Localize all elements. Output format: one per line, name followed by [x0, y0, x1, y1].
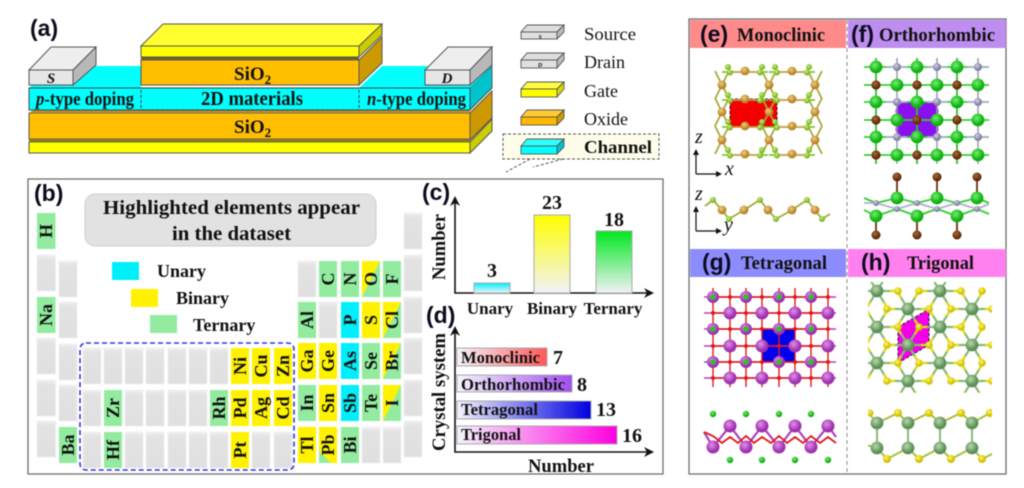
channel highlight box	[503, 134, 659, 172]
highlighted elements: S	[361, 315, 381, 325]
legend source: S	[538, 35, 542, 41]
highlighted elements: O	[361, 272, 381, 286]
axes side e: y	[722, 214, 733, 236]
bottom oxide label: 2	[265, 125, 271, 140]
highlighted elements: Na	[36, 304, 56, 326]
panel: trigonal (h)	[848, 249, 1006, 463]
highlighted elements: Ba	[58, 434, 78, 456]
unit cell f	[896, 102, 938, 138]
highlighted elements: Ga	[297, 349, 317, 373]
bar: monoclinic: Monoclinic	[461, 348, 540, 367]
source contact: S	[47, 71, 55, 87]
legend: element types: Binary	[176, 288, 229, 308]
highlighted elements: Cu	[251, 354, 271, 378]
top view atoms h	[867, 281, 993, 394]
legend oxide	[521, 109, 628, 129]
header e	[690, 20, 846, 48]
header f: (f)	[851, 21, 874, 47]
legend drain: D	[537, 63, 543, 69]
highlighted elements: N	[340, 272, 360, 286]
header h: (h)	[861, 249, 890, 275]
panel: monoclinic (e)	[690, 20, 846, 236]
highlighted elements: Sn	[318, 393, 338, 413]
axes top e: x	[724, 158, 734, 180]
highlighted elements: Tl	[297, 436, 317, 454]
side view atoms g	[704, 411, 836, 463]
highlighted elements: Sb	[340, 393, 360, 413]
side view atoms f	[864, 172, 989, 240]
y label c: Number	[430, 214, 450, 280]
bar: trigonal	[457, 425, 642, 447]
x label d: Number	[528, 457, 594, 477]
bar: unary: 3	[487, 260, 497, 282]
panel frame b c d	[28, 179, 663, 474]
legend channel	[521, 137, 652, 157]
side view atoms h	[866, 409, 994, 463]
side view atoms e	[705, 197, 830, 222]
highlighted elements: Hf	[103, 439, 123, 460]
legend: element types: Ternary	[193, 315, 255, 335]
transition metals dashed box	[80, 343, 294, 470]
axes side e: z	[694, 183, 703, 205]
top view atoms g	[704, 288, 836, 387]
drain contact	[425, 47, 492, 87]
highlighted elements: Rh	[209, 396, 229, 420]
channel layer: 2D materials	[201, 89, 303, 110]
title box: in the dataset	[172, 223, 291, 245]
bar: binary	[527, 192, 578, 318]
header h	[848, 249, 1006, 277]
label b: (b)	[34, 180, 63, 206]
gate stack: 2	[265, 72, 271, 87]
highlighted elements: Se	[361, 352, 381, 370]
axes top e	[693, 126, 734, 180]
highlighted elements: Pb	[318, 434, 338, 456]
bar: trigonal: 16	[622, 425, 642, 447]
bar: binary: 23	[542, 192, 562, 214]
bar: binary: Binary	[527, 299, 578, 318]
highlighted elements: F	[382, 274, 402, 284]
title box	[85, 194, 376, 246]
panel: orthorhombic (f)	[848, 20, 1006, 240]
legend source: Source	[584, 24, 636, 44]
label c: (c)	[422, 179, 450, 205]
y label d: Crystal system	[430, 332, 450, 451]
highlighted elements: I	[382, 399, 402, 407]
highlighted elements: In	[297, 394, 317, 412]
bar: tetragonal: 13	[596, 399, 616, 421]
gate stack	[141, 24, 382, 87]
channel layer	[29, 88, 470, 110]
bar: ternary: Ternary	[584, 299, 643, 318]
legend: element types: Unary	[157, 261, 206, 281]
crystal structures frame	[689, 19, 1006, 474]
panel: bar chart (c)	[422, 179, 654, 318]
highlighted elements: Zr	[103, 398, 123, 418]
highlighted elements: Ge	[318, 350, 338, 372]
highlighted elements: Ag	[251, 397, 271, 419]
legend source	[521, 24, 636, 44]
source contact	[29, 47, 96, 87]
legend oxide: Oxide	[584, 109, 628, 129]
bar: tetragonal	[457, 399, 616, 421]
legend drain: Drain	[584, 52, 625, 72]
axes top e: z	[694, 126, 703, 148]
channel layer: p-type doping	[34, 89, 134, 110]
legend drain	[521, 52, 625, 72]
axes side e	[693, 183, 733, 236]
bar: ternary: 18	[604, 209, 624, 231]
highlighted elements: As	[340, 351, 360, 371]
top view atoms e	[715, 64, 822, 158]
bar: trigonal: Trigonal	[461, 425, 521, 444]
bar: orthorhombic: Orthorhombic	[461, 375, 565, 394]
panel: bar chart (d)	[426, 302, 654, 477]
legend gate: Gate	[584, 81, 618, 101]
drain contact: D	[441, 71, 453, 87]
channel layer: n-type doping	[367, 89, 466, 110]
bar: monoclinic	[457, 347, 563, 369]
legend: device layers	[503, 24, 659, 172]
legend gate	[521, 81, 618, 101]
header f	[848, 20, 1006, 48]
header g: (g)	[702, 249, 731, 275]
highlighted elements: Zn	[273, 355, 293, 377]
bar: ternary	[584, 209, 643, 318]
bar: monoclinic: 7	[553, 347, 563, 369]
highlighted elements: Al	[297, 311, 317, 329]
highlighted elements: Bi	[340, 436, 360, 454]
top view atoms f	[864, 58, 989, 164]
highlighted elements: Te	[361, 394, 381, 412]
header h: Trigonal	[907, 254, 974, 274]
highlighted elements: Pd	[230, 397, 250, 419]
bar: orthorhombic: 8	[577, 374, 587, 396]
panel: periodic table (b)	[34, 180, 422, 470]
bar: tetragonal: Tetragonal	[461, 400, 538, 419]
highlighted elements: Cd	[273, 396, 293, 420]
unit cell g	[762, 329, 795, 362]
panel: device schematic (a)	[29, 15, 492, 153]
empty element cells	[37, 213, 422, 468]
gate stack: SiO	[234, 64, 265, 85]
unit cell h	[898, 309, 929, 363]
highlighted elements: P	[340, 314, 360, 326]
header e: Monoclinic	[737, 26, 825, 46]
highlighted elements: H	[36, 224, 56, 238]
header g: Tetragonal	[741, 254, 827, 274]
bottom oxide label: SiO	[234, 117, 265, 138]
header f: Orthorhombic	[879, 26, 995, 46]
legend channel: Channel	[584, 137, 652, 157]
axes d	[450, 326, 654, 457]
highlighted elements: Br	[382, 351, 402, 371]
axes c	[450, 196, 654, 298]
highlighted elements	[36, 213, 402, 468]
header e: (e)	[700, 21, 728, 47]
panel: tetragonal (g)	[690, 249, 846, 463]
highlighted elements: Ni	[230, 357, 250, 375]
highlighted elements: C	[318, 272, 338, 286]
header g	[690, 249, 846, 277]
highlighted elements: Pt	[230, 442, 250, 458]
label a: (a)	[30, 15, 58, 41]
highlighted elements: Cl	[382, 311, 402, 329]
legend: element types	[112, 261, 255, 335]
bar: unary	[467, 260, 514, 318]
title box: Highlighted elements appear	[103, 197, 360, 219]
label d: (d)	[426, 302, 455, 328]
unit cell e	[730, 99, 777, 127]
bar: unary: Unary	[467, 299, 514, 318]
